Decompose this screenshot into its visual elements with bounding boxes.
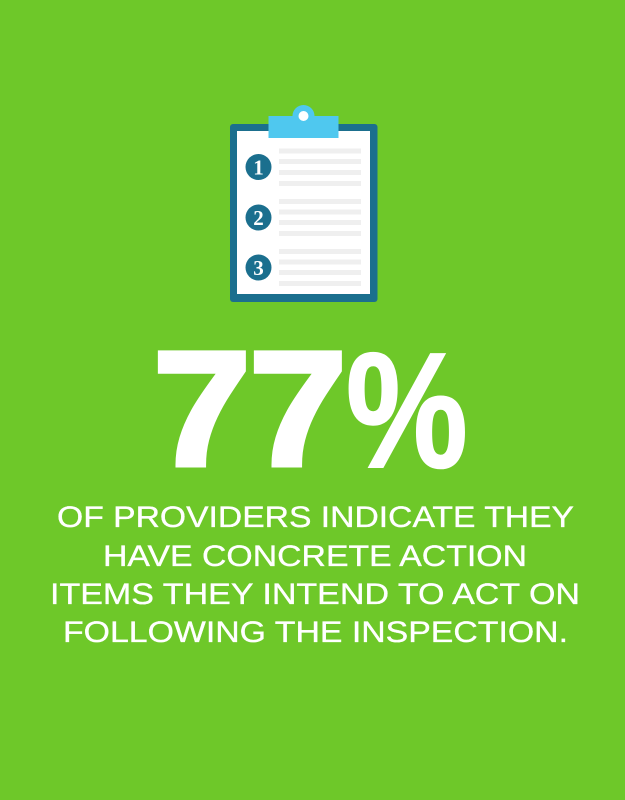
caption text: HAVE CONCRETE ACTION (103, 540, 527, 573)
clip (268, 105, 338, 138)
big statistic: 77% (153, 317, 468, 503)
caption text (50, 501, 580, 649)
list item 3 (246, 249, 361, 286)
list item 1: 1 (253, 156, 264, 180)
caption text: OF PROVIDERS INDICATE THEY (57, 501, 574, 534)
caption text: FOLLOWING THE INSPECTION. (63, 616, 568, 649)
big statistic: 77%: 7 (153, 317, 251, 500)
list item 2: 2 (253, 206, 264, 230)
big statistic: 77%: % (346, 319, 468, 503)
big statistic: 77%: 7 (249, 317, 347, 500)
paper sheet (237, 131, 370, 294)
list item 1 (246, 148, 361, 186)
list item 3: 3 (253, 256, 264, 280)
list item 2 (246, 199, 361, 236)
caption text: ITEMS THEY INTEND TO ACT ON (50, 578, 580, 611)
clipboard board (230, 124, 378, 302)
icon: clipboard (230, 105, 378, 302)
